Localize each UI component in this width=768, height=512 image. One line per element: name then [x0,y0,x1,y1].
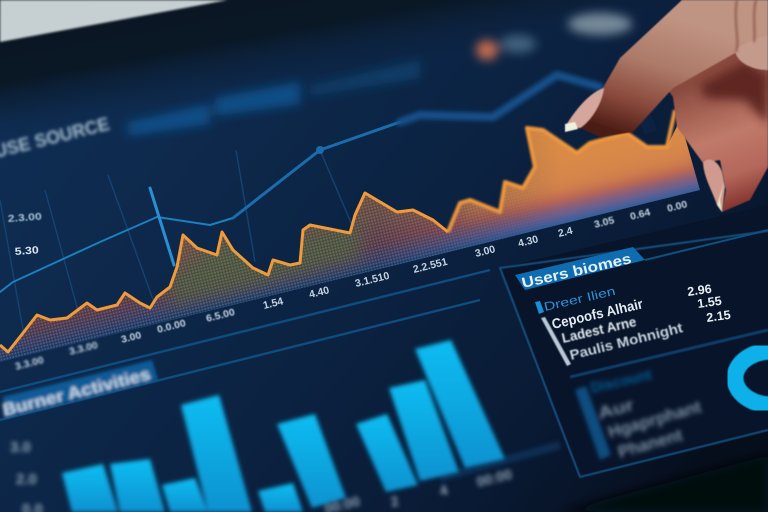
time axis labels: 0.64 [629,206,652,223]
donut chart [735,351,768,405]
list values: 1.55 [696,294,723,311]
lower list [575,366,704,462]
nail tip [565,122,578,132]
left axis labels: 5.30 [14,244,39,258]
list rows [550,295,685,363]
panel divider [570,330,768,377]
bar chart y axis labels: 3.0 [10,439,31,456]
users tab heading: Users biomes [520,251,633,292]
bar chart y axis labels [10,439,43,512]
time axis labels: 3.3.00 [14,354,45,373]
area outline soft part [448,110,675,232]
knuckle crease [736,0,756,52]
dark gap under the finger [638,112,657,135]
bar chart x axis labels: 00:00 [475,466,514,490]
panel lines [0,270,560,478]
list values: 2.15 [705,308,732,325]
chart grid lines [0,150,352,335]
bar chart heading tab: Burner Activities [0,365,152,420]
bar chart x axis labels [323,466,514,512]
lower list: Hgaprphant [606,397,704,442]
hand [565,0,768,212]
bars [62,340,505,512]
left axis labels: 2.3.00 [7,211,42,225]
left axis labels [7,211,42,258]
list rows: Ladest Arne [560,313,638,346]
panel: users summary [500,205,768,477]
time axis labels: 3.3.00 [68,339,99,358]
shadow between fingers [700,62,768,125]
time axis labels: 3.05 [593,214,616,231]
panel outline [500,231,768,477]
list rows: Cepoofs Alhair [550,295,645,332]
list values: 2.96 [686,282,713,299]
list values [686,282,732,325]
time axis labels: 4.40 [308,284,331,301]
second finger tip [735,35,768,70]
panel: lower bar chart [0,270,560,512]
index fingernail [565,88,604,128]
lower fingernail [703,160,725,212]
orange area chart [0,108,700,362]
area fill with dot texture [0,125,700,362]
time axis labels: 2.2.551 [412,256,449,276]
time axis labels: 0.0.00 [156,317,187,336]
panel upper edge [645,230,768,260]
time axis labels: 3.00 [474,243,497,260]
blurred header tabs [128,13,632,136]
list rows: Paulis Mohnight [568,319,685,363]
panel background [500,205,768,477]
time axis labels: 3.1.510 [354,270,391,290]
time axis labels: 6.5.00 [205,306,236,325]
bar chart x axis labels: 4 [438,481,449,499]
list sub heading: Dreer Ilien [543,284,617,314]
time axis labels: 2.4 [557,225,574,240]
bar chart y axis labels: 2.0 [16,471,37,488]
time axis labels: 4.30 [517,233,540,250]
index finger [580,0,768,137]
users tab heading [515,247,645,292]
time axis labels: 1.54 [262,295,285,312]
bottom-right dark vignette [560,455,768,512]
back of hand and middle finger [668,20,768,212]
list markers [535,301,544,314]
time axis labels: 3.00 [120,329,143,346]
time axis labels [14,198,689,373]
area outline sharp part [0,193,448,352]
blue line series [0,75,600,292]
lower list: Phanent [616,425,685,462]
lower list: Discount [589,366,653,397]
bar chart x axis labels: 2 [389,492,400,510]
bezel: dark top band and bright window strip [0,0,768,200]
lower list: Aur [596,395,636,423]
time axis labels: 0.00 [666,198,689,215]
